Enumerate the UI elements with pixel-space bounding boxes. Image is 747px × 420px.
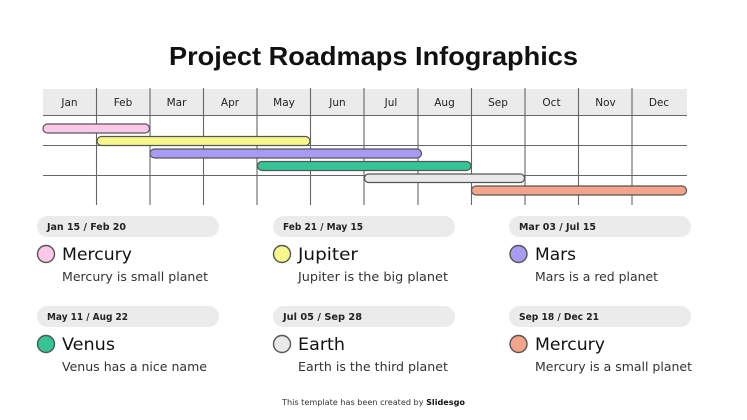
panel: Jupiter, Feb 21 / May 15: Jupiter is the big planet [297, 269, 448, 284]
month labels: Aug [434, 97, 455, 109]
panel: Mercury, Jan 15 / Feb 20: Mercury is small planet [62, 269, 208, 284]
panel: Mercury, Jan 15 / Feb 20: Jan 15 / Feb 20 [46, 222, 126, 233]
bar: Jupiter Feb 21 to May 15 [97, 136, 310, 146]
panel: Mercury, Sep 18 / Dec 21: Mercury [535, 335, 605, 354]
footer credit: This template has been created by Slidesgo [281, 398, 465, 407]
panel: Venus, May 11 / Aug 22: Venus has a nice name [62, 359, 207, 374]
month labels: Dec [649, 97, 669, 109]
panel: Mercury, Jan 15 / Feb 20 [37, 216, 219, 284]
panel: Mercury, Jan 15 / Feb 20: Mercury [62, 245, 132, 264]
panel: Jupiter, Feb 21 / May 15 [273, 216, 455, 284]
month labels: Oct [542, 97, 561, 109]
panel: Mercury, Sep 18 / Dec 21: Mercury is a small planet [535, 359, 692, 374]
panel: Mars, Mar 03 / Jul 15: Mar 03 / Jul 15 [519, 222, 596, 233]
panel: Mars, Mar 03 / Jul 15 [509, 216, 691, 284]
month labels: Sep [488, 97, 508, 109]
month labels: Jun [328, 97, 346, 109]
panel: Mars, Mar 03 / Jul 15: Mars [535, 245, 576, 264]
bar: Earth Jul 05 to Sep 28 [364, 174, 524, 182]
bar: Venus May 11 to Aug 22 [258, 162, 471, 170]
panel: Mercury, Sep 18 / Dec 21 [509, 306, 692, 374]
month labels: Jul [384, 97, 397, 109]
panel: Mercury, Sep 18 / Dec 21: Sep 18 / Dec 21 [519, 312, 599, 323]
gantt chart [43, 88, 687, 205]
title: Project Roadmaps Infographics [169, 41, 578, 71]
panel: Earth, Jul 05 / Sep 28: Earth [298, 335, 345, 354]
month labels: Jan [60, 97, 78, 109]
panel: Venus, May 11 / Aug 22: Venus [62, 335, 115, 354]
panel: Venus, May 11 / Aug 22 [37, 306, 219, 374]
panel: Earth, Jul 05 / Sep 28: Jul 05 / Sep 28 [282, 312, 362, 323]
month header band [43, 89, 687, 116]
panel: Venus, May 11 / Aug 22: May 11 / Aug 22 [47, 312, 128, 323]
panel: Jupiter, Feb 21 / May 15: Jupiter [297, 245, 358, 264]
bar: Mercury Jan 15 to Feb 20 [43, 124, 150, 133]
panel: Jupiter, Feb 21 / May 15: Feb 21 / May 15 [283, 222, 363, 233]
month labels: Nov [595, 97, 616, 109]
panel: Earth, Jul 05 / Sep 28: Earth is the third planet [298, 359, 448, 374]
bar: Mercury Sep 18 to Dec 21 [472, 186, 686, 195]
panel: Mars, Mar 03 / Jul 15: Mars is a red planet [535, 269, 658, 284]
month labels: Mar [167, 97, 187, 109]
month labels: Feb [114, 97, 133, 109]
panel: Earth, Jul 05 / Sep 28 [273, 306, 455, 374]
month labels: Apr [221, 97, 240, 109]
bar: Mars Mar 03 to Jul 15 [150, 149, 422, 158]
month labels [60, 97, 669, 109]
month labels: May [273, 97, 295, 109]
